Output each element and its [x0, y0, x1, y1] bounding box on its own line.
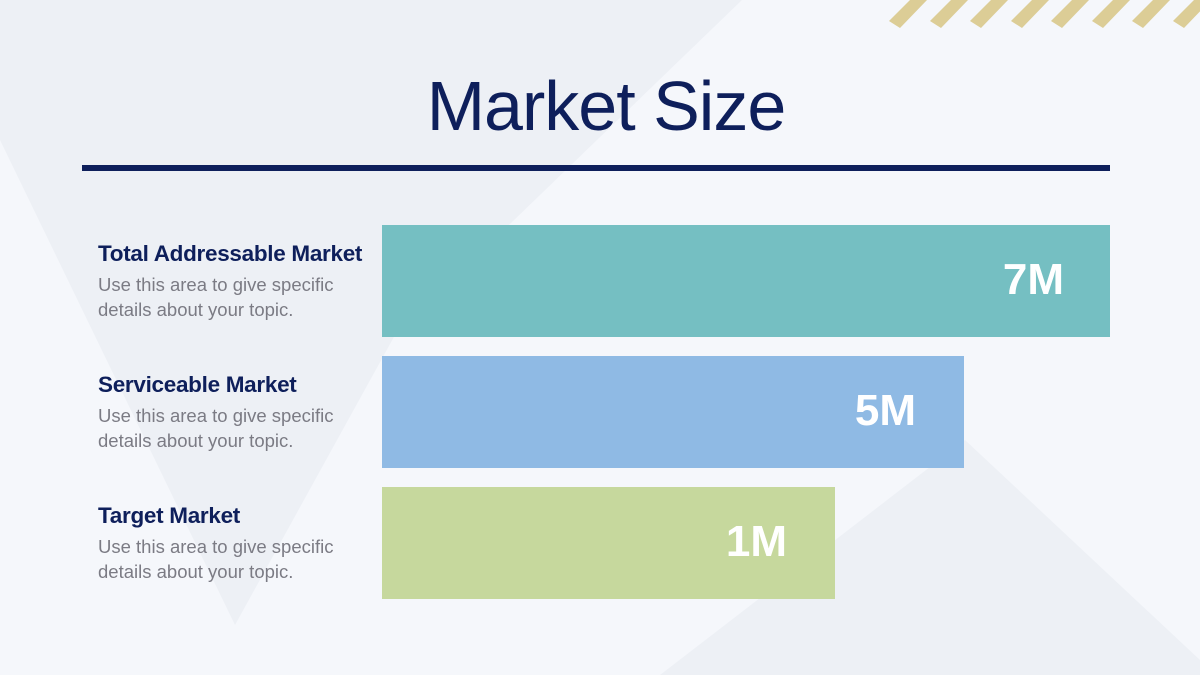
bar: 7M: [382, 225, 1110, 337]
label: target market: [98, 503, 333, 582]
label: total addressable market: [98, 241, 362, 320]
label: target market: Use this area to give specific: [98, 536, 333, 557]
label: serviceable market: [98, 372, 333, 451]
label: target market: Target Market: [98, 503, 240, 528]
bar: 1M: 1M: [726, 517, 787, 566]
title underline: [82, 165, 1110, 171]
label: serviceable market: Serviceable Market: [98, 372, 296, 397]
label: total addressable market: details about your topic.: [98, 299, 293, 320]
label: target market: details about your topic.: [98, 561, 293, 582]
bar: 7M: 7M: [1003, 255, 1064, 304]
bar: 5M: [382, 356, 964, 468]
label: serviceable market: details about your topic.: [98, 430, 293, 451]
title: Market Size: [427, 67, 785, 145]
bar: 5M: 5M: [855, 386, 916, 435]
decorative stripes: [889, 0, 1200, 28]
bar: 1M: [382, 487, 835, 599]
label: serviceable market: Use this area to give specific: [98, 405, 333, 426]
label: total addressable market: Total Addressable Market: [98, 241, 362, 266]
label: total addressable market: Use this area to give specific: [98, 274, 333, 295]
